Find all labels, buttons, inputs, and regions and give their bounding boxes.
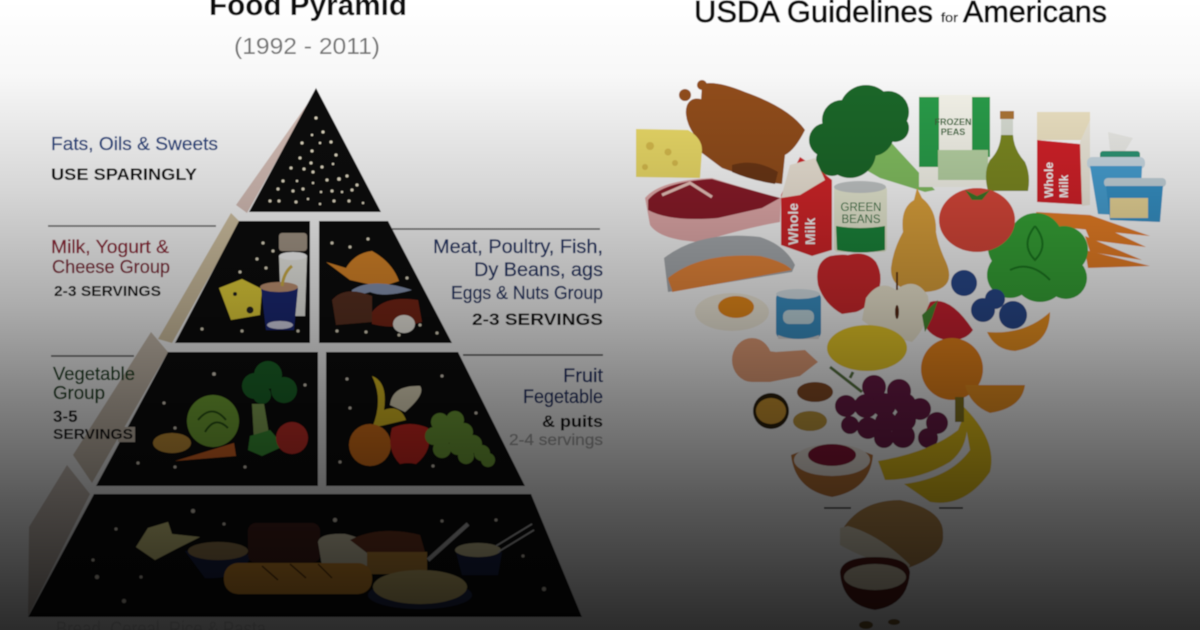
food: nut pieces xyxy=(793,411,827,431)
icon: chicken xyxy=(326,251,399,287)
pyramid tier: fats, oils and sweets xyxy=(249,88,381,212)
food: carrots xyxy=(1036,212,1150,268)
food: orange xyxy=(921,338,983,400)
icon: fish xyxy=(350,284,412,298)
heading: USDA Guidelines for Americans xyxy=(694,0,1107,29)
food illustration: USDA guidelines xyxy=(636,80,1166,629)
icon: carrot xyxy=(175,443,236,461)
left label: milk group: 2-3 SERVINGS xyxy=(54,283,161,300)
left label: vegetable group: SERVINGS xyxy=(53,426,133,443)
right label: meat group: 2-3 SERVINGS xyxy=(472,311,603,329)
icon: yogurt cup xyxy=(260,266,298,330)
food: broccoli xyxy=(809,85,935,192)
food: butternut pear xyxy=(891,188,949,292)
icon: cheese xyxy=(219,279,262,320)
left label: vegetable group: Group xyxy=(53,383,105,403)
food: milk carton right: Whole xyxy=(1042,162,1056,198)
food: shrimp xyxy=(732,338,818,382)
right label: fruit group: 2-4 servings xyxy=(509,432,603,449)
icon: pasta plate xyxy=(368,570,472,609)
heading: USDA Guidelines for Americans: for xyxy=(941,10,959,25)
pyramid: side bevel xyxy=(28,96,313,616)
right label: meat group xyxy=(392,229,603,329)
food: tomato xyxy=(939,188,1015,252)
icon: meat and egg xyxy=(372,299,422,333)
left label: fats, oils and sweets xyxy=(51,133,218,184)
right label: fruit group xyxy=(463,355,604,449)
food: lettuce xyxy=(987,213,1088,302)
pyramid tier: vegetables xyxy=(96,352,318,486)
food: milk carton left: Milk xyxy=(802,218,818,245)
food: small can xyxy=(776,289,821,339)
food: green beans can: BEANS xyxy=(842,214,881,226)
food: frozen peas bag: FROZEN xyxy=(934,117,972,127)
left label: fats, oils and sweets: Fats, Oils & Sweets xyxy=(51,133,218,154)
left label: vegetable group: 3-5 xyxy=(53,407,78,426)
food: grains xyxy=(859,619,900,629)
food: grapes xyxy=(830,367,948,448)
icon: broccoli xyxy=(242,361,297,440)
icon: beans and nuts xyxy=(332,291,372,325)
right label: meat group: Eggs & Nuts Group xyxy=(451,282,603,303)
icon: cabbage xyxy=(187,395,239,447)
food: salmon xyxy=(664,236,795,292)
icon: banana xyxy=(372,376,421,428)
icon: orange xyxy=(349,424,391,466)
food: frozen peas bag: PEAS xyxy=(941,127,965,137)
icon: baguette xyxy=(224,563,372,594)
icon: tomato xyxy=(276,422,308,454)
left label: vegetable group: Vegetable xyxy=(53,364,135,384)
pyramid tier: fruit xyxy=(326,352,525,486)
left label: milk group: Cheese Group xyxy=(52,257,170,277)
right label: fruit group: Fegetable xyxy=(523,387,603,408)
food: orange slice xyxy=(987,312,1050,351)
food: cheese xyxy=(636,129,702,178)
icon: cereal bowl xyxy=(185,542,252,578)
pyramid tier: bread, cereal, rice, pasta xyxy=(28,494,582,617)
icon: rice bowl and chopsticks xyxy=(455,524,534,575)
food: dash marks xyxy=(824,507,963,509)
pyramid tier: milk, yogurt and cheese xyxy=(175,221,310,343)
food: walnut xyxy=(753,393,789,429)
food: almond xyxy=(797,382,833,402)
right label: fruit group: Fruit xyxy=(563,366,604,387)
icon: glass of milk xyxy=(279,233,307,316)
food: milk carton left: Whole xyxy=(785,203,801,245)
food: milk carton right xyxy=(1037,112,1090,206)
food: blueberries xyxy=(951,270,1027,329)
pyramid tier: meat, poultry, fish xyxy=(319,221,452,343)
icon: white bread xyxy=(318,534,368,566)
food: yogurt tubs xyxy=(1087,132,1166,222)
food: bread loaf xyxy=(840,500,943,570)
food: strawberry xyxy=(922,300,973,340)
left label: milk group xyxy=(48,226,216,300)
right label: meat group: Meat, Poultry, Fish, xyxy=(433,236,603,258)
icon: fork xyxy=(428,524,468,560)
left label: vegetable group xyxy=(51,356,135,443)
food: frozen peas bag xyxy=(919,95,990,187)
subheading: years: (1992 - 2011) xyxy=(234,33,380,59)
food: fruit bowl xyxy=(791,444,873,497)
food: milk carton left xyxy=(781,157,832,256)
food: halved apple xyxy=(862,272,929,342)
food: apple xyxy=(817,254,881,314)
left label: milk group: Milk, Yogurt & xyxy=(51,237,169,257)
right label: meat group: Dy Beans, ags xyxy=(474,259,603,281)
food: rice bowl xyxy=(840,557,910,610)
icon: brown bread xyxy=(350,531,427,574)
food: chicken xyxy=(677,80,805,184)
icon: crackers xyxy=(136,522,200,560)
food: lemon xyxy=(827,325,907,371)
food: milk carton right: Milk xyxy=(1057,174,1071,198)
icon: potato xyxy=(153,433,191,453)
food: steak xyxy=(645,178,781,242)
food: green beans can: GREEN xyxy=(841,202,881,214)
food: fried egg xyxy=(695,293,769,331)
left label: fats, oils and sweets: USE SPARINGLY xyxy=(51,165,198,184)
food: orange wedge xyxy=(965,385,1025,413)
right label: fruit group: & puits xyxy=(542,412,603,431)
icon: dark loaf xyxy=(248,523,320,563)
food: green beans can xyxy=(834,181,887,252)
food: bananas xyxy=(878,397,991,503)
icon: apple xyxy=(390,424,430,464)
icon: leaf stems xyxy=(248,430,284,456)
food: olive oil bottle xyxy=(986,111,1029,191)
icon: grapes xyxy=(425,411,495,467)
